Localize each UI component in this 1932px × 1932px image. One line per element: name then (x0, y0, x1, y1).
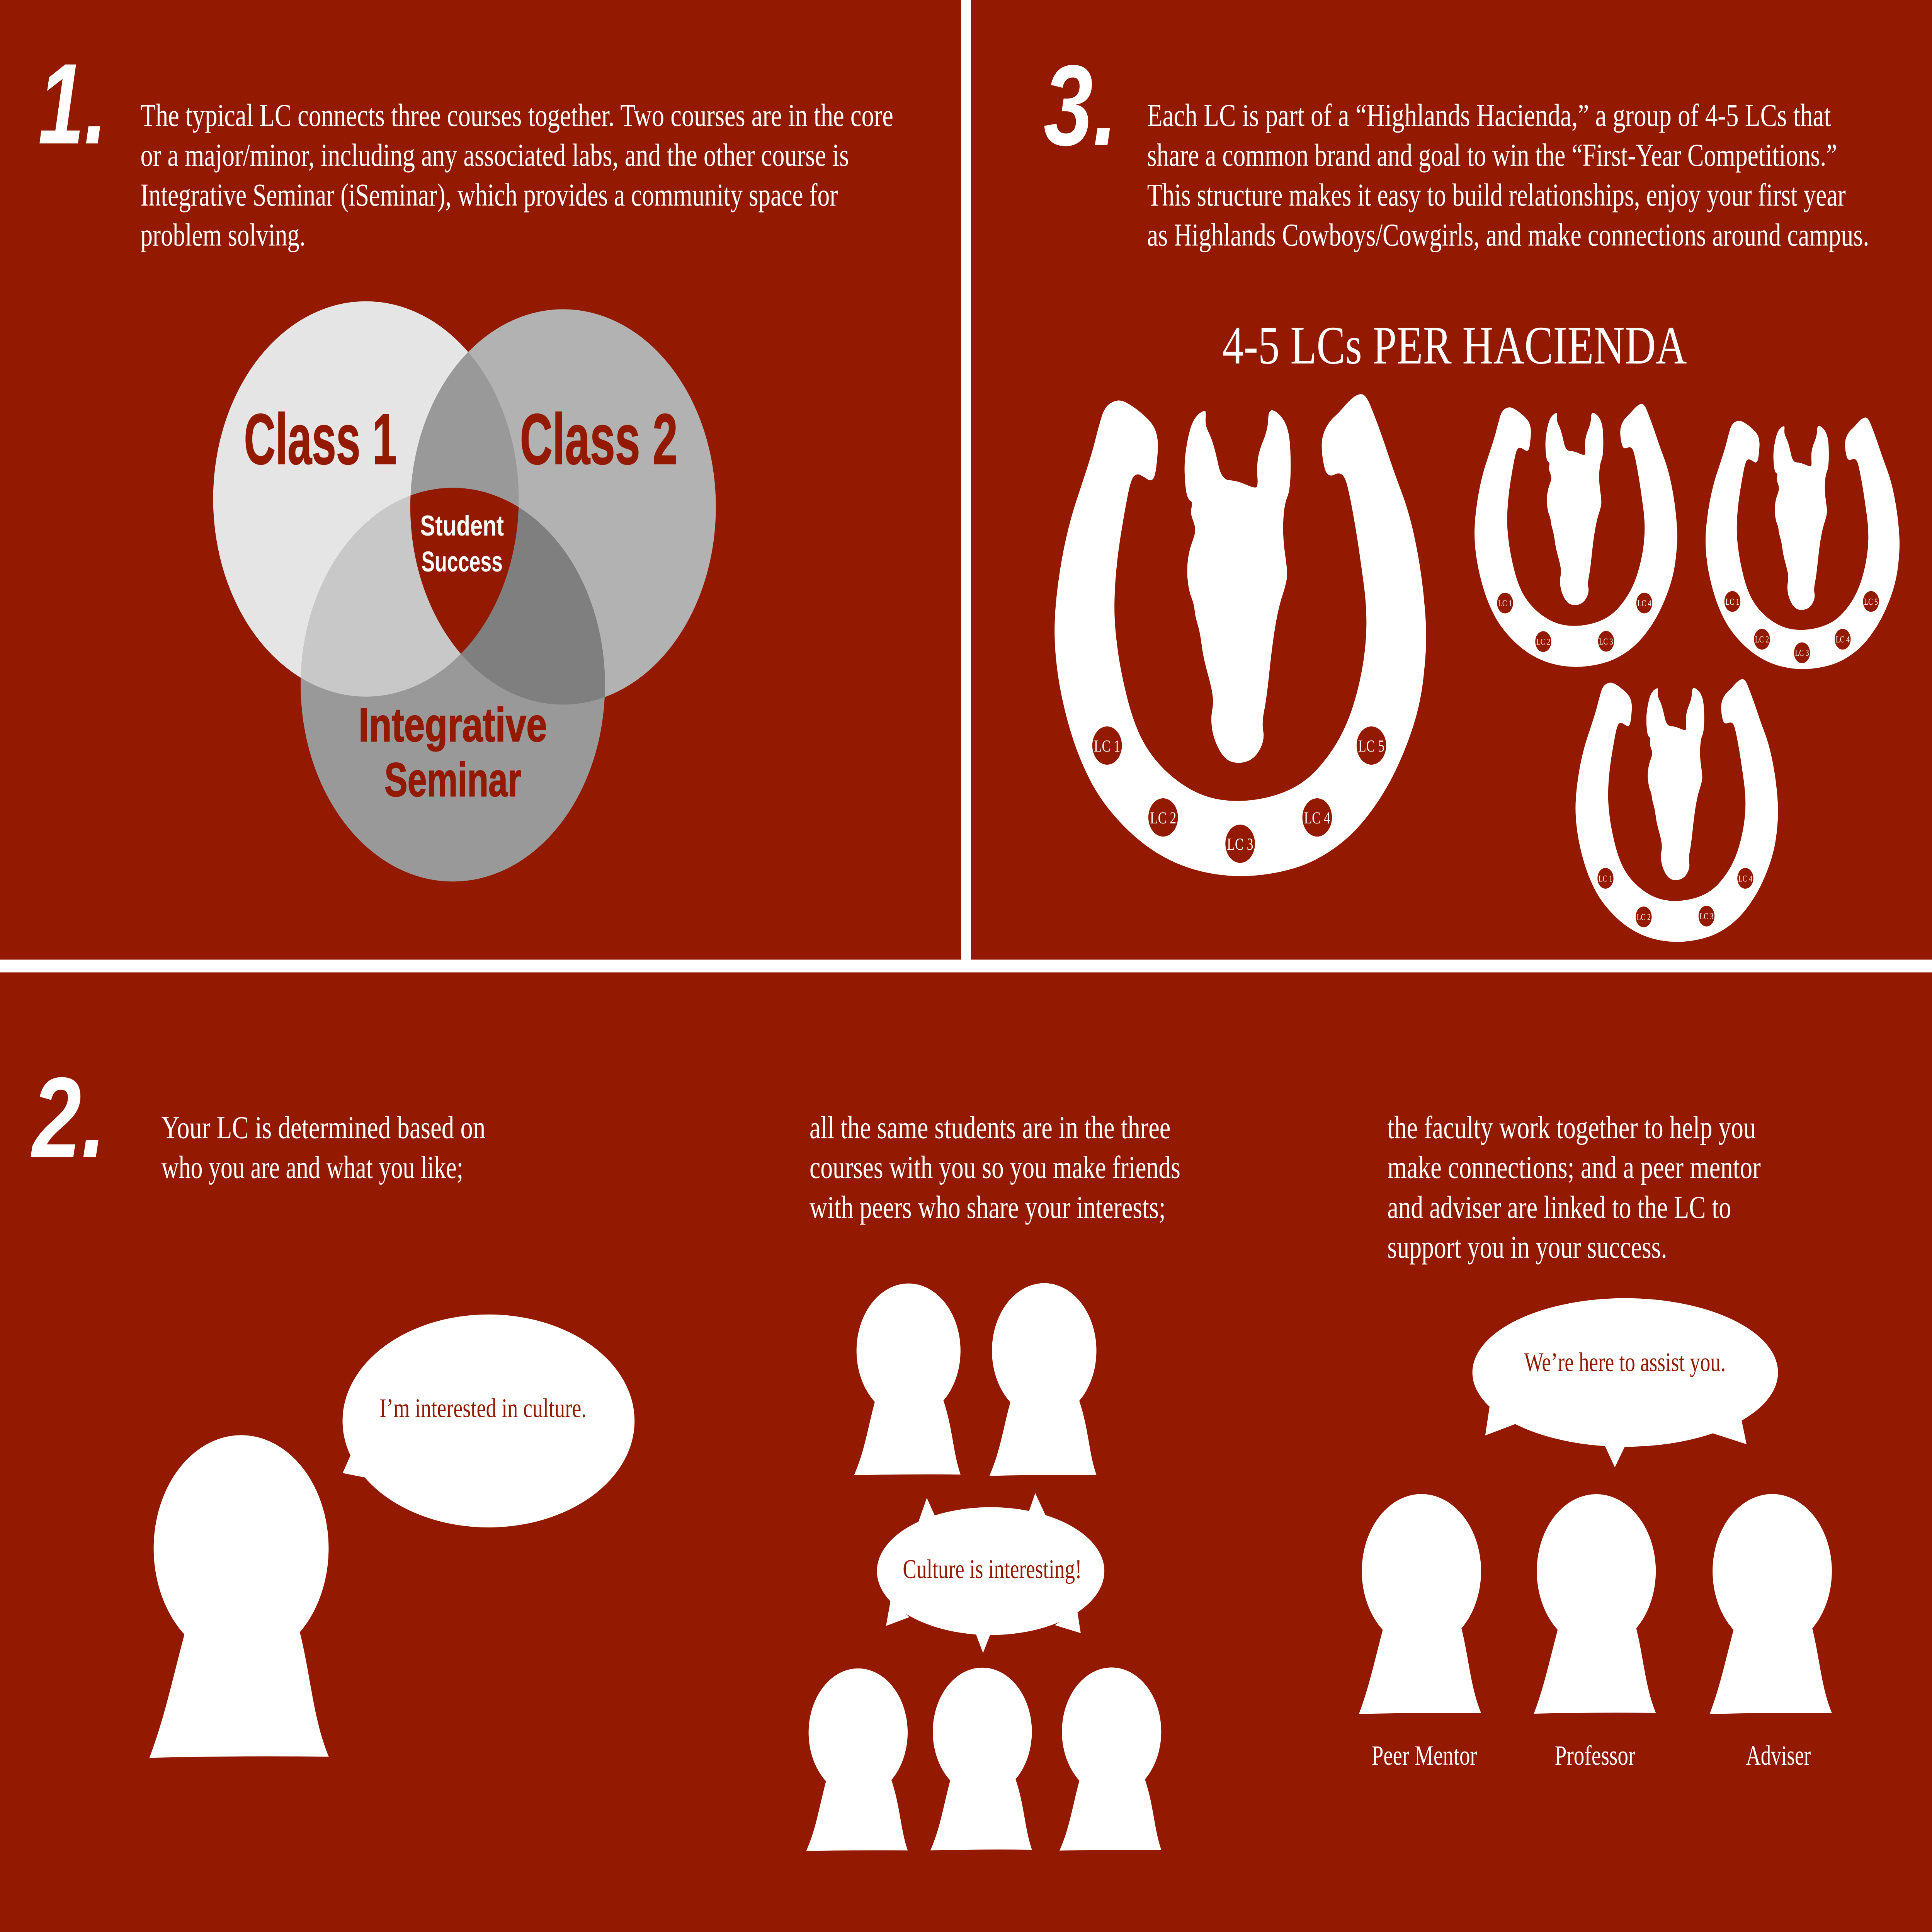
LC markers: LC 2 (1150, 809, 1176, 827)
overlap: Class 1 and Seminar (301, 495, 461, 697)
group: three students bottom (806, 1667, 1161, 1851)
step number 3: 3. (1044, 42, 1117, 170)
venn diagram (213, 301, 716, 881)
label: Professor: Professor (1555, 1740, 1635, 1770)
text block: Highlands Hacienda description: as Highlands Cowboys/Cowgirls, and make connections around campus. (1147, 217, 1869, 252)
text block: same students (810, 1110, 1180, 1225)
text block: typical LC description (141, 97, 893, 252)
LC markers: LC 1 (1599, 874, 1612, 884)
LC markers (1725, 591, 1879, 663)
text block: typical LC description: or a major/minor, including any associated labs, and the other course is (141, 137, 849, 173)
text block: Highlands Hacienda description: This structure makes it easy to build relationships, enjoy your first year (1147, 177, 1846, 213)
text block: same students: with peers who share your interests; (810, 1189, 1166, 1225)
text block: faculty support: make connections; and a peer mentor (1388, 1150, 1761, 1185)
LC markers: LC 4 (1836, 635, 1850, 645)
venn circle: Integrative Seminar (301, 488, 605, 881)
speech bubble: interested in culture (342, 1315, 634, 1527)
label: Class 1: Class 1 (244, 400, 397, 480)
speech bubble: interested in culture: I’m interested in culture. (379, 1393, 587, 1423)
text block: faculty support: the faculty work together to help you (1388, 1110, 1756, 1145)
LC markers (1092, 726, 1386, 863)
panel 2: your LC (0, 973, 1932, 1932)
text block: typical LC description: The typical LC connects three courses together. Two courses are in the core (141, 97, 893, 133)
overlap: Class 2 and Seminar (410, 488, 605, 705)
LC markers: LC 5 (1864, 597, 1878, 607)
label: Peer Mentor: Peer Mentor (1372, 1740, 1477, 1770)
overlap: centre (410, 488, 519, 654)
LC markers: LC 3 (1699, 912, 1714, 922)
LC markers: LC 2 (1755, 635, 1769, 645)
LC markers: LC 3 (1795, 649, 1809, 658)
venn circle: Class 1 (213, 301, 519, 697)
text block: Highlands Hacienda description: share a common brand and goal to win the “First-Year Competitions.” (1147, 137, 1837, 173)
text block: who you are: Your LC is determined based on (162, 1110, 485, 1145)
speech bubble: culture is interesting (877, 1493, 1104, 1653)
speech bubble: here to assist you: We’re here to assist you. (1524, 1347, 1726, 1377)
label: Student Success: Student (420, 510, 504, 542)
step number 1: 1. (38, 40, 107, 168)
text block: Highlands Hacienda description (1147, 97, 1869, 252)
label: Integrative Seminar (359, 699, 547, 806)
text block: Highlands Hacienda description: Each LC is part of a “Highlands Hacienda,” a group of 4-5 LCs that (1147, 97, 1831, 133)
icon: professor silhouette (1534, 1494, 1656, 1714)
text block: faculty support: and adviser are linked to the LC to (1388, 1189, 1731, 1225)
label: Integrative Seminar: Seminar (384, 753, 521, 806)
LC markers: LC 4 (1738, 874, 1752, 884)
LC markers (1497, 593, 1652, 652)
LC markers: LC 2 (1536, 638, 1550, 647)
LC markers: LC 4 (1637, 599, 1651, 608)
LC markers: LC 3 (1227, 835, 1253, 854)
panel 1: course connections (0, 0, 961, 959)
LC markers: LC 3 (1599, 637, 1613, 646)
label: Integrative Seminar: Integrative (359, 699, 547, 752)
LC markers (1597, 868, 1753, 927)
step number 2: 2. (31, 1054, 106, 1182)
icon: adviser silhouette (1710, 1494, 1832, 1714)
speech bubble: culture is interesting: Culture is interesting! (903, 1554, 1082, 1584)
LC markers: LC 1 (1094, 737, 1120, 755)
group: two students top (854, 1283, 1097, 1476)
venn circle: Class 2 (410, 309, 716, 704)
text block: who you are: who you are and what you like; (162, 1150, 463, 1185)
icon: peer mentor silhouette (1359, 1494, 1481, 1714)
icon: small horseshoe top right (1706, 417, 1900, 669)
speech bubble: here to assist you (1473, 1298, 1778, 1467)
LC markers: LC 1 (1725, 597, 1740, 607)
label: Student Success: Success (422, 546, 503, 578)
text block: who you are (162, 1110, 485, 1185)
icon: student silhouette (150, 1435, 329, 1758)
overlap: Class 1 and Class 2 (410, 352, 519, 507)
text block: same students: all the same students are in the three (810, 1110, 1170, 1145)
label: Class 2: Class 2 (520, 400, 678, 480)
label: Student Success (420, 510, 504, 578)
text block: faculty support: support you in your success. (1388, 1229, 1667, 1265)
LC markers: LC 1 (1498, 599, 1512, 608)
text block: faculty support (1388, 1110, 1761, 1265)
label: Adviser: Adviser (1746, 1740, 1811, 1770)
heading: 4-5 LCs per hacienda: 4-5 LCs PER HACIENDA (1222, 315, 1687, 376)
icon: small horseshoe top middle (1475, 404, 1677, 667)
LC markers: LC 5 (1358, 737, 1384, 755)
text block: typical LC description: problem solving. (141, 217, 306, 252)
LC markers: LC 4 (1304, 809, 1330, 827)
text block: typical LC description: Integrative Seminar (iSeminar), which provides a community space for (141, 177, 838, 213)
panel 3: haciendas (971, 0, 1932, 959)
icon: small horseshoe bottom (1575, 679, 1778, 942)
LC markers: LC 2 (1637, 913, 1651, 922)
text block: same students: courses with you so you make friends (810, 1150, 1180, 1185)
icon: large horseshoe with horse head (1054, 394, 1426, 876)
